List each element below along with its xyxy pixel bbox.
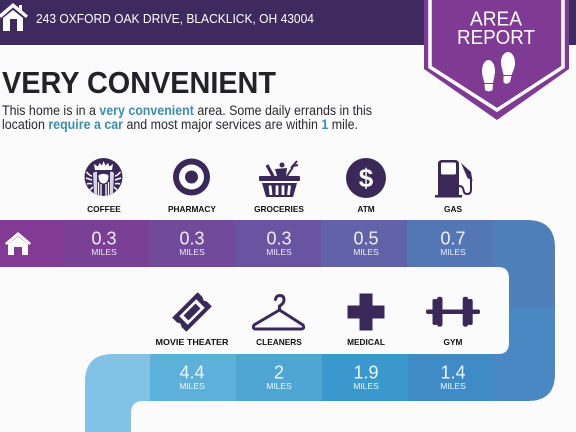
stop: gas: MILES [440,247,466,257]
stop: movie theater [156,292,229,391]
description: This home is in a very convenient area. Some daily errands in this [2,103,372,118]
address: 243 OXFORD OAK DRIVE, BLACKLICK, OH 43004 [36,11,314,26]
icon: target [173,158,210,196]
distance: 1.9 [353,362,379,382]
stop: gym: MILES [440,381,466,391]
stop: pharmacy: MILES [179,247,205,257]
distance: 0.7 [440,228,466,248]
icon: home on route [5,232,31,255]
face [98,170,108,184]
label: GAS [444,204,462,214]
icon: ticket [172,292,212,332]
icon: hanger [253,296,304,329]
distance: 4.4 [179,362,205,382]
badge: area report: REPORT [457,27,535,49]
label: COFFEE [87,204,121,214]
stop: coffee: MILES [91,247,117,257]
left turn [85,354,150,432]
distance: 0.3 [179,228,205,248]
icon: coffee logo [84,158,122,196]
stop: atm: MILES [353,247,379,257]
icon: footprints [482,52,515,92]
badge: area report [424,0,569,120]
label: GROCERIES [254,204,304,214]
title: VERY CONVENIENT [2,65,276,100]
badge title: AREA [470,8,523,30]
label: GYM [444,337,463,347]
hair [93,172,114,195]
crown [94,161,113,170]
icon: gas pump [435,160,472,198]
distance: 0.3 [91,228,117,248]
row 1 cells [0,220,63,267]
stop: groceries: MILES [266,247,292,257]
label: MEDICAL [347,337,385,347]
row 2 cells [150,354,236,401]
stop: coffee [84,158,122,257]
stop: cleaners: MILES [266,381,292,391]
icon: dollar: $ [359,163,374,193]
tails [86,172,121,190]
icon: basket [259,161,300,197]
stop: groceries [254,161,304,257]
icon: medical cross [348,294,384,330]
right turn [493,220,555,307]
distance: 0.3 [266,228,292,248]
stop: gym [426,297,480,391]
distance: 1.4 [440,362,466,382]
stop: medical [347,294,385,391]
stop: cleaners [253,296,304,391]
label: CLEANERS [256,337,302,347]
icon: header home [0,3,28,31]
header bar [0,0,576,45]
route band [0,220,555,432]
distance: 0.5 [353,228,379,248]
description: location require a car and most major services are within 1 mile. [2,117,358,132]
stop: gas [435,160,472,257]
stop: pharmacy [168,158,216,257]
distance: 2 [274,362,284,382]
stop: movie theater: MILES [179,381,205,391]
stop: medical: MILES [353,381,379,391]
icon: dumbbell [426,297,480,327]
label: MOVIE THEATER [156,337,229,347]
description [2,103,372,132]
stop: atm [346,158,386,257]
label: ATM [357,204,375,214]
label: PHARMACY [168,204,216,214]
